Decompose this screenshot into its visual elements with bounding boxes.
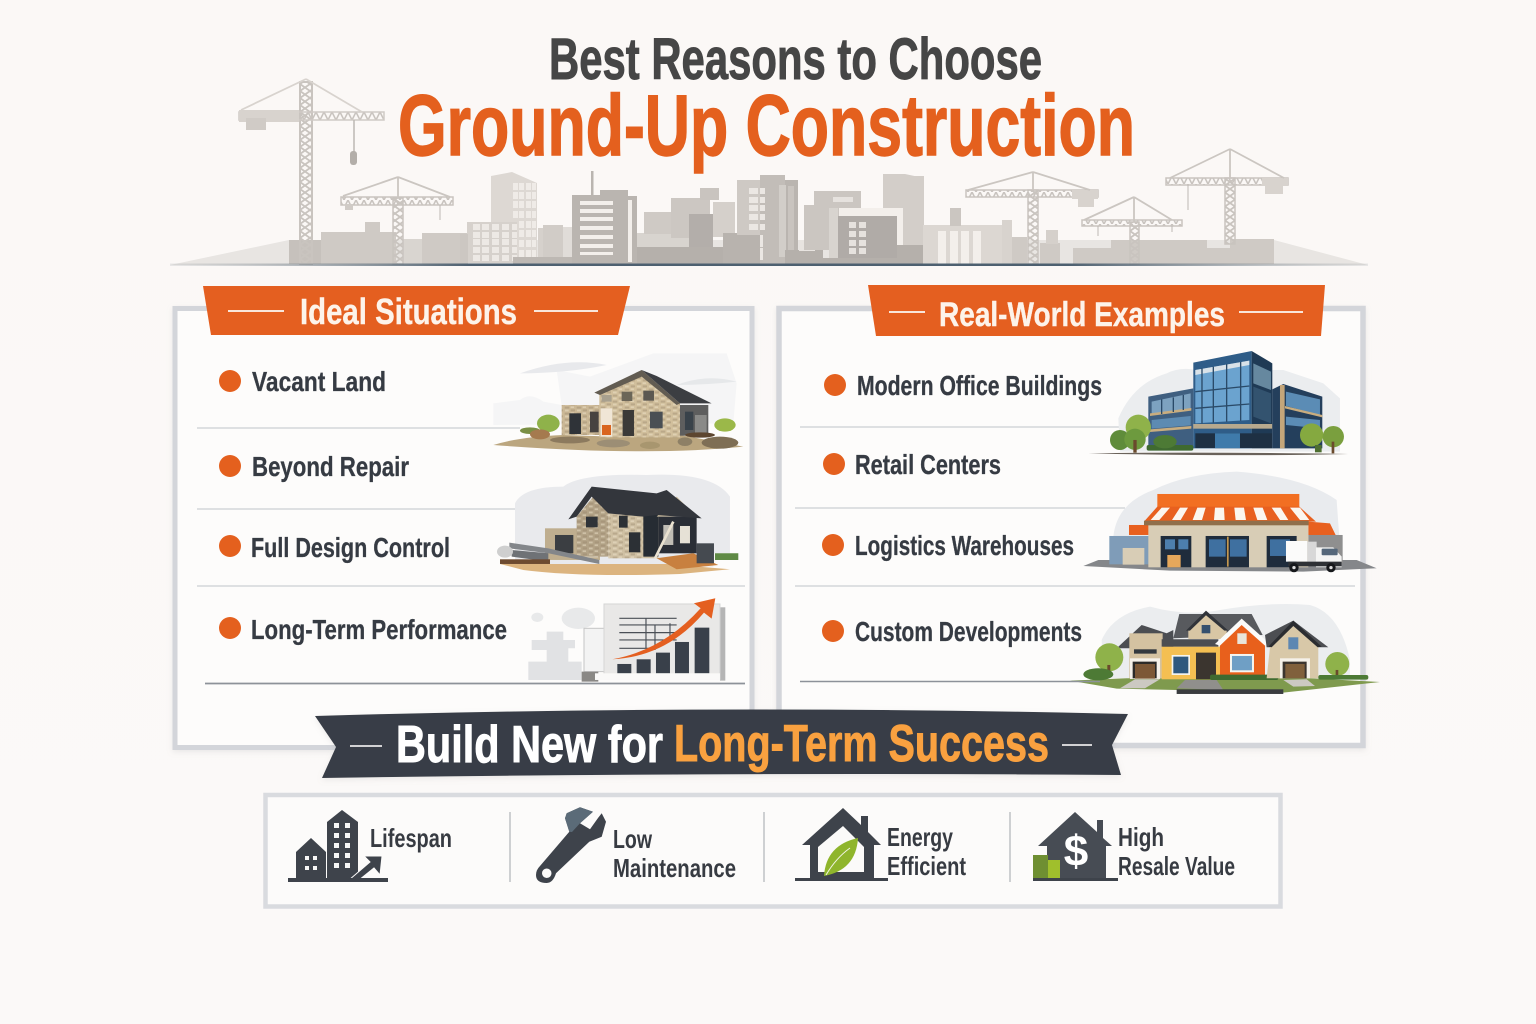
icon: house with dollar sign and bars [1033,812,1118,881]
item: retail centers [823,449,1001,480]
crane 2 [341,177,453,264]
item: full design control: Full Design Control [251,532,450,563]
ribbon heading: real-world examples: Real-World Examples [939,296,1225,334]
item: retail centers: Retail Centers [855,449,1001,480]
dividers [795,427,1355,586]
panel: ideal situations [175,286,752,748]
ribbon heading: real-world examples [868,285,1325,336]
illustration: retail center [1083,472,1377,572]
benefit: lifespan [288,810,452,882]
panel: real-world examples [779,285,1380,746]
benefit: energy efficient [795,808,966,881]
benefit: high resale value: Resale Value [1118,851,1235,881]
icon: house with leaf [795,808,888,881]
item: custom developments: Custom Developments [855,616,1082,647]
ribbon heading: ideal situations [203,286,630,335]
benefit: low maintenance: Low [613,824,653,854]
item: vacant land [219,366,386,397]
item: custom developments [822,616,1082,647]
item: full design control [219,532,450,563]
icon: wrench [536,807,606,883]
banner: build new for long-term success: Long-Term Success [674,715,1049,773]
skyline illustration with cranes [170,79,1368,266]
crane 5 [1166,149,1288,244]
icon: buildings with arrow [288,810,388,882]
crane 3 [966,172,1098,264]
illustration: stone house on vacant land [493,353,743,451]
benefit: low maintenance [536,807,736,883]
item: modern office buildings [824,370,1102,401]
dividers [197,428,745,586]
panel: benefits bar [266,795,1280,906]
item: logistics warehouses: Logistics Warehouses [855,530,1074,561]
benefit: lifespan: Lifespan [370,823,452,853]
icon: house with dollar sign and bars: $ [1064,827,1088,876]
benefit: energy efficient: Efficient [887,851,966,881]
illustration: custom development houses [1070,604,1380,694]
benefit: high resale value: High [1118,822,1164,852]
illustration: damaged house [497,475,738,575]
item: logistics warehouses [822,530,1074,561]
title line 1: Best Reasons to Choose [549,27,1042,92]
item: modern office buildings: Modern Office Buildings [857,370,1102,401]
banner: build new for long-term success: Build New for [396,716,663,774]
benefit: energy efficient: Energy [887,822,953,852]
benefit: low maintenance: Maintenance [613,853,736,883]
item: beyond repair [219,451,409,482]
title line 2: Ground-Up Construction [398,78,1135,174]
crane 1 [239,79,384,264]
item: vacant land: Vacant Land [252,366,386,397]
item: long-term performance: Long-Term Performance [251,614,507,645]
benefit: high resale value [1033,812,1235,881]
crane 4 [1082,197,1182,264]
item: beyond repair: Beyond Repair [252,451,409,482]
illustration: office building [1088,351,1348,455]
illustration: performance chart [528,598,725,682]
banner: build new for long-term success [315,709,1128,778]
ribbon heading: ideal situations: Ideal Situations [300,291,517,332]
